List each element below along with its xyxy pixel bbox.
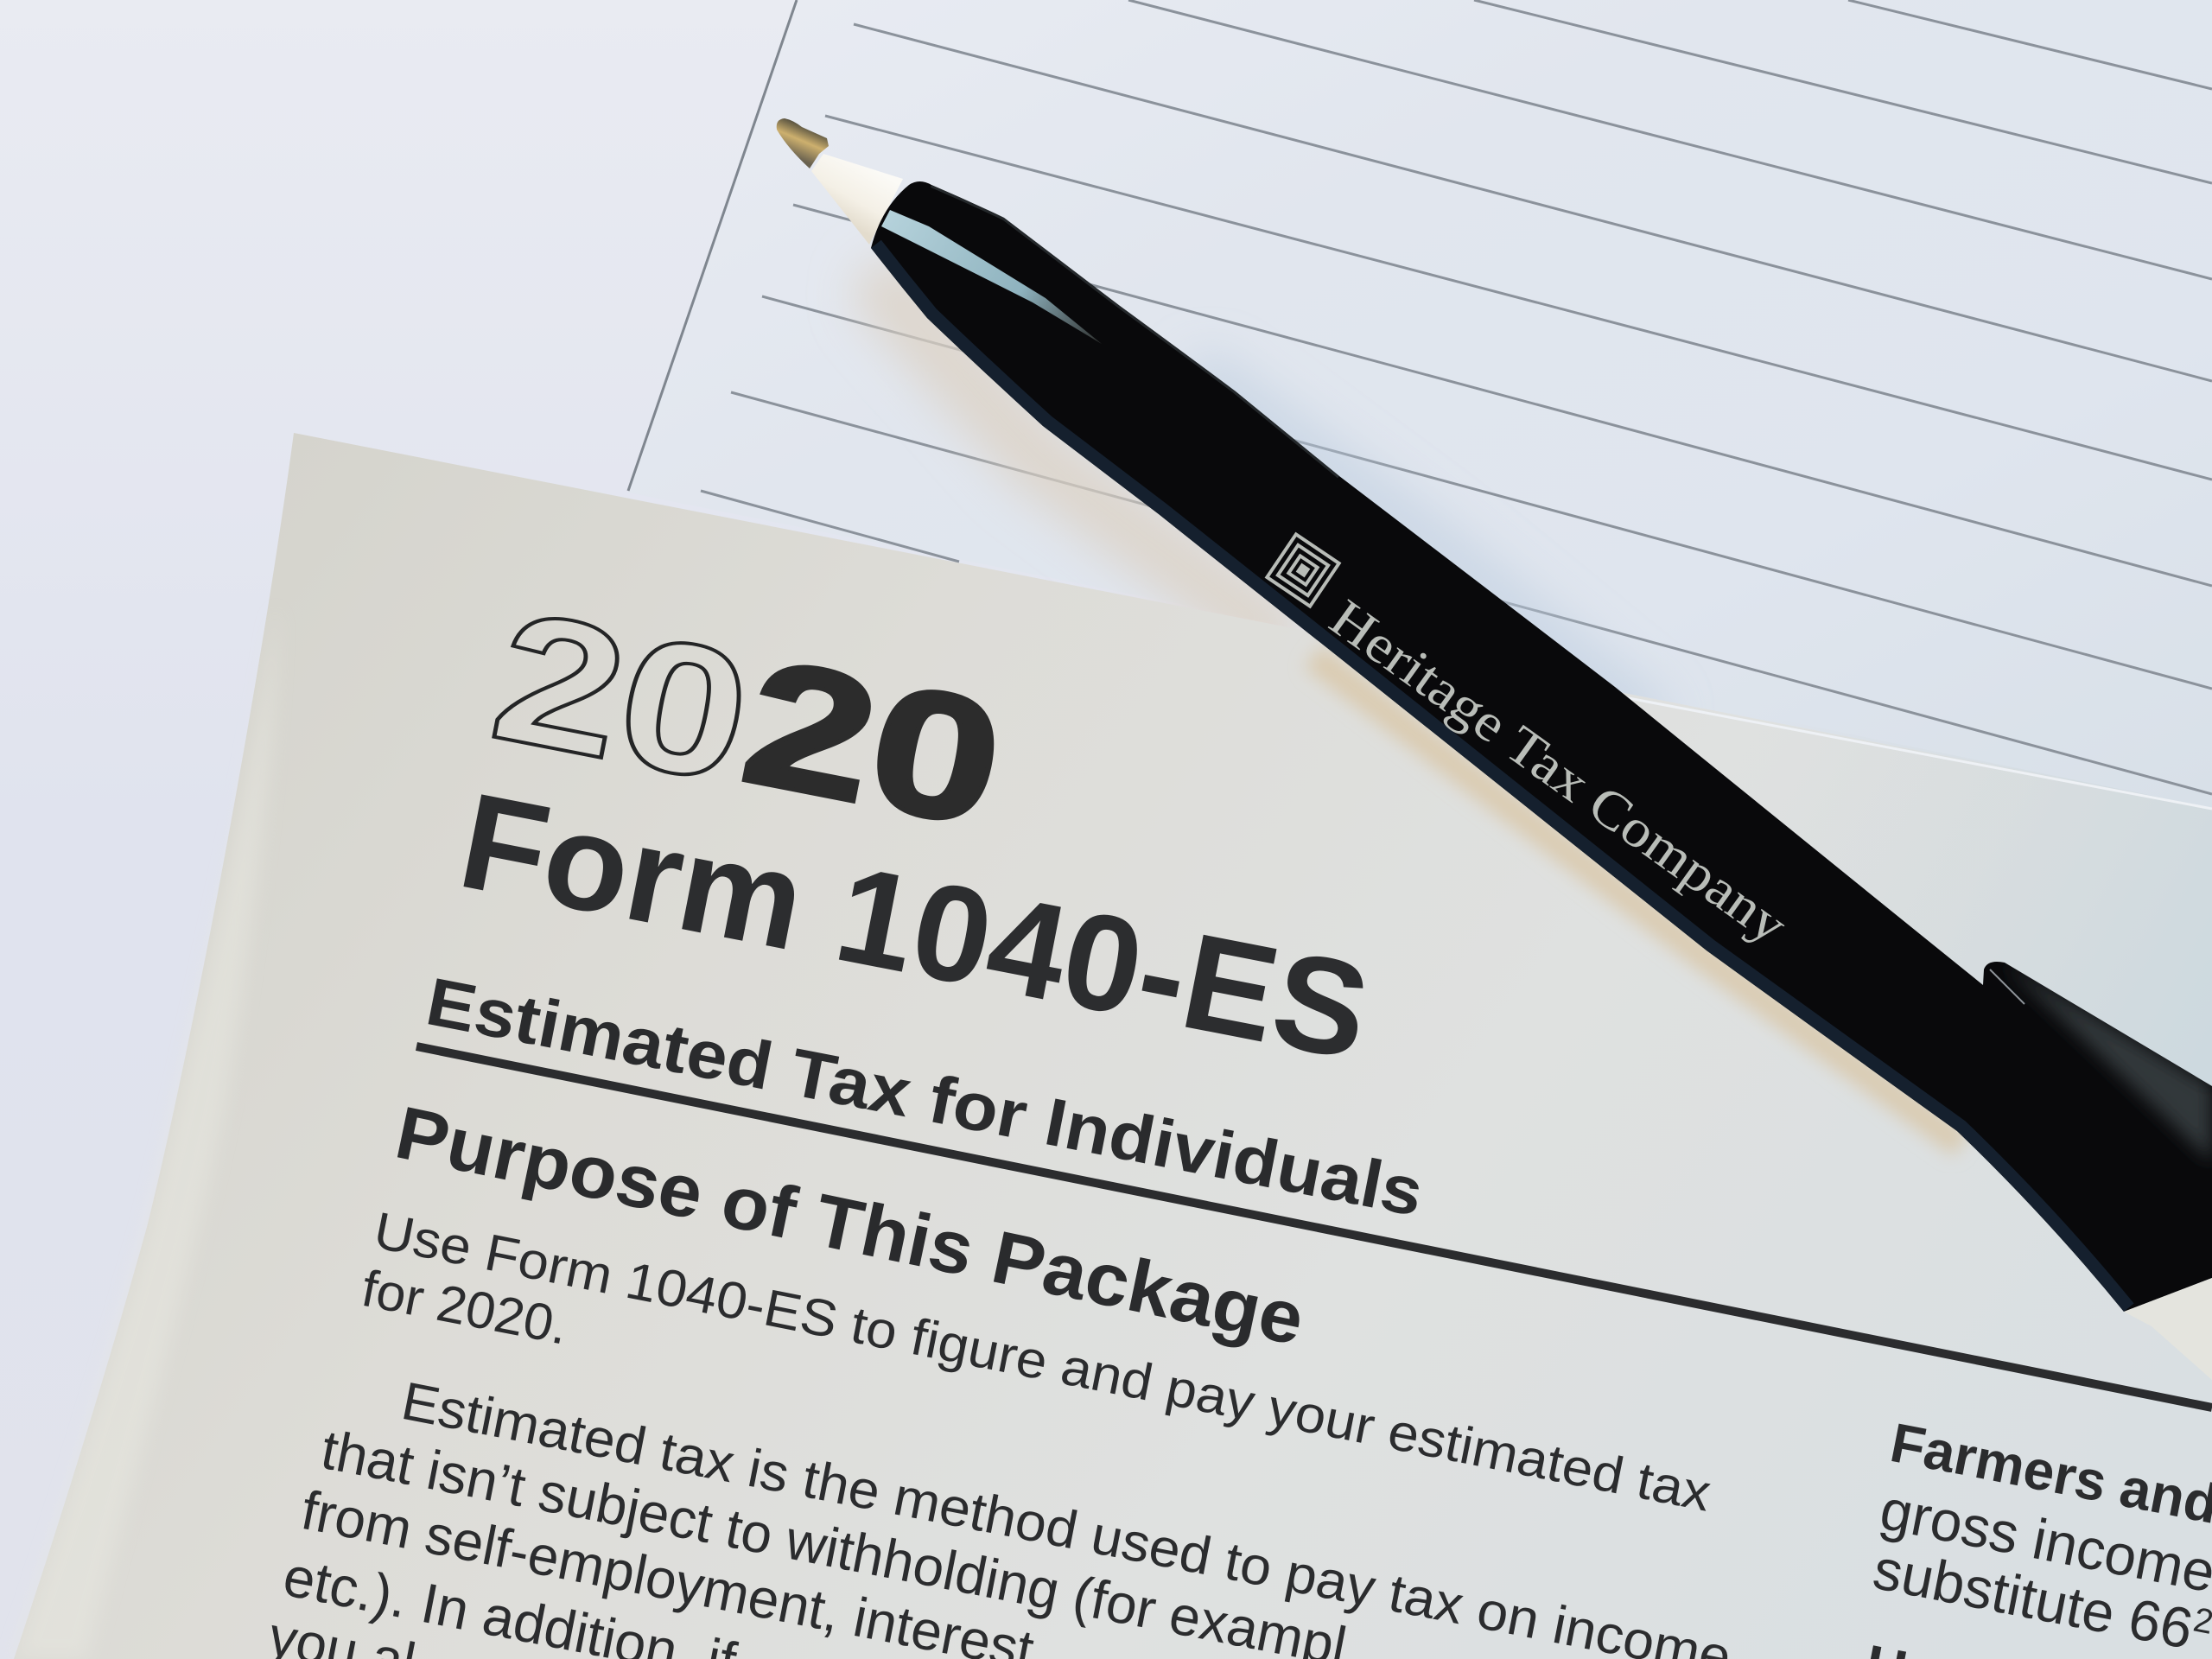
farmers column: substitute 66 xyxy=(1868,1536,2198,1659)
curled left edge highlight xyxy=(14,605,276,1659)
heading rule xyxy=(416,1046,2212,1408)
farmers column xyxy=(1859,1411,2212,1659)
pen nib xyxy=(777,118,829,168)
section heading: Purpose of This Package xyxy=(389,1091,1311,1361)
lined worksheet paper xyxy=(628,0,2212,812)
outlined year digits: 20 xyxy=(479,572,765,823)
purpose paragraph: Use Form 1040-ES to figure and pay your estimated tax xyxy=(369,1201,1715,1522)
pen white cone xyxy=(811,154,903,245)
worksheet edge highlight xyxy=(1615,696,2212,809)
barrel shading xyxy=(871,185,2212,1312)
pen xyxy=(777,118,2212,1380)
pen shadow on worksheet xyxy=(890,294,1642,717)
worksheet margin line xyxy=(628,0,797,491)
form subtitle: Estimated Tax for Individuals xyxy=(421,963,1429,1230)
purpose paragraph: for 2020. xyxy=(358,1259,573,1356)
pen logo xyxy=(1267,534,1339,607)
solid year digits: 20 xyxy=(730,621,1017,864)
pen shadow on form xyxy=(1313,657,1961,1145)
clip highlight xyxy=(1990,969,2024,1004)
barrel highlight xyxy=(881,210,1102,344)
pen imprint: Heritage Tax Company xyxy=(1319,588,1798,956)
form title: Form 1040-ES xyxy=(449,765,1381,1089)
pen barrel xyxy=(871,181,2212,1312)
pen white end cap xyxy=(2124,1278,2212,1380)
worksheet ruled lines xyxy=(701,0,2212,794)
tax form sheet xyxy=(14,433,2212,1659)
farmers column: gross income xyxy=(1875,1477,2212,1605)
